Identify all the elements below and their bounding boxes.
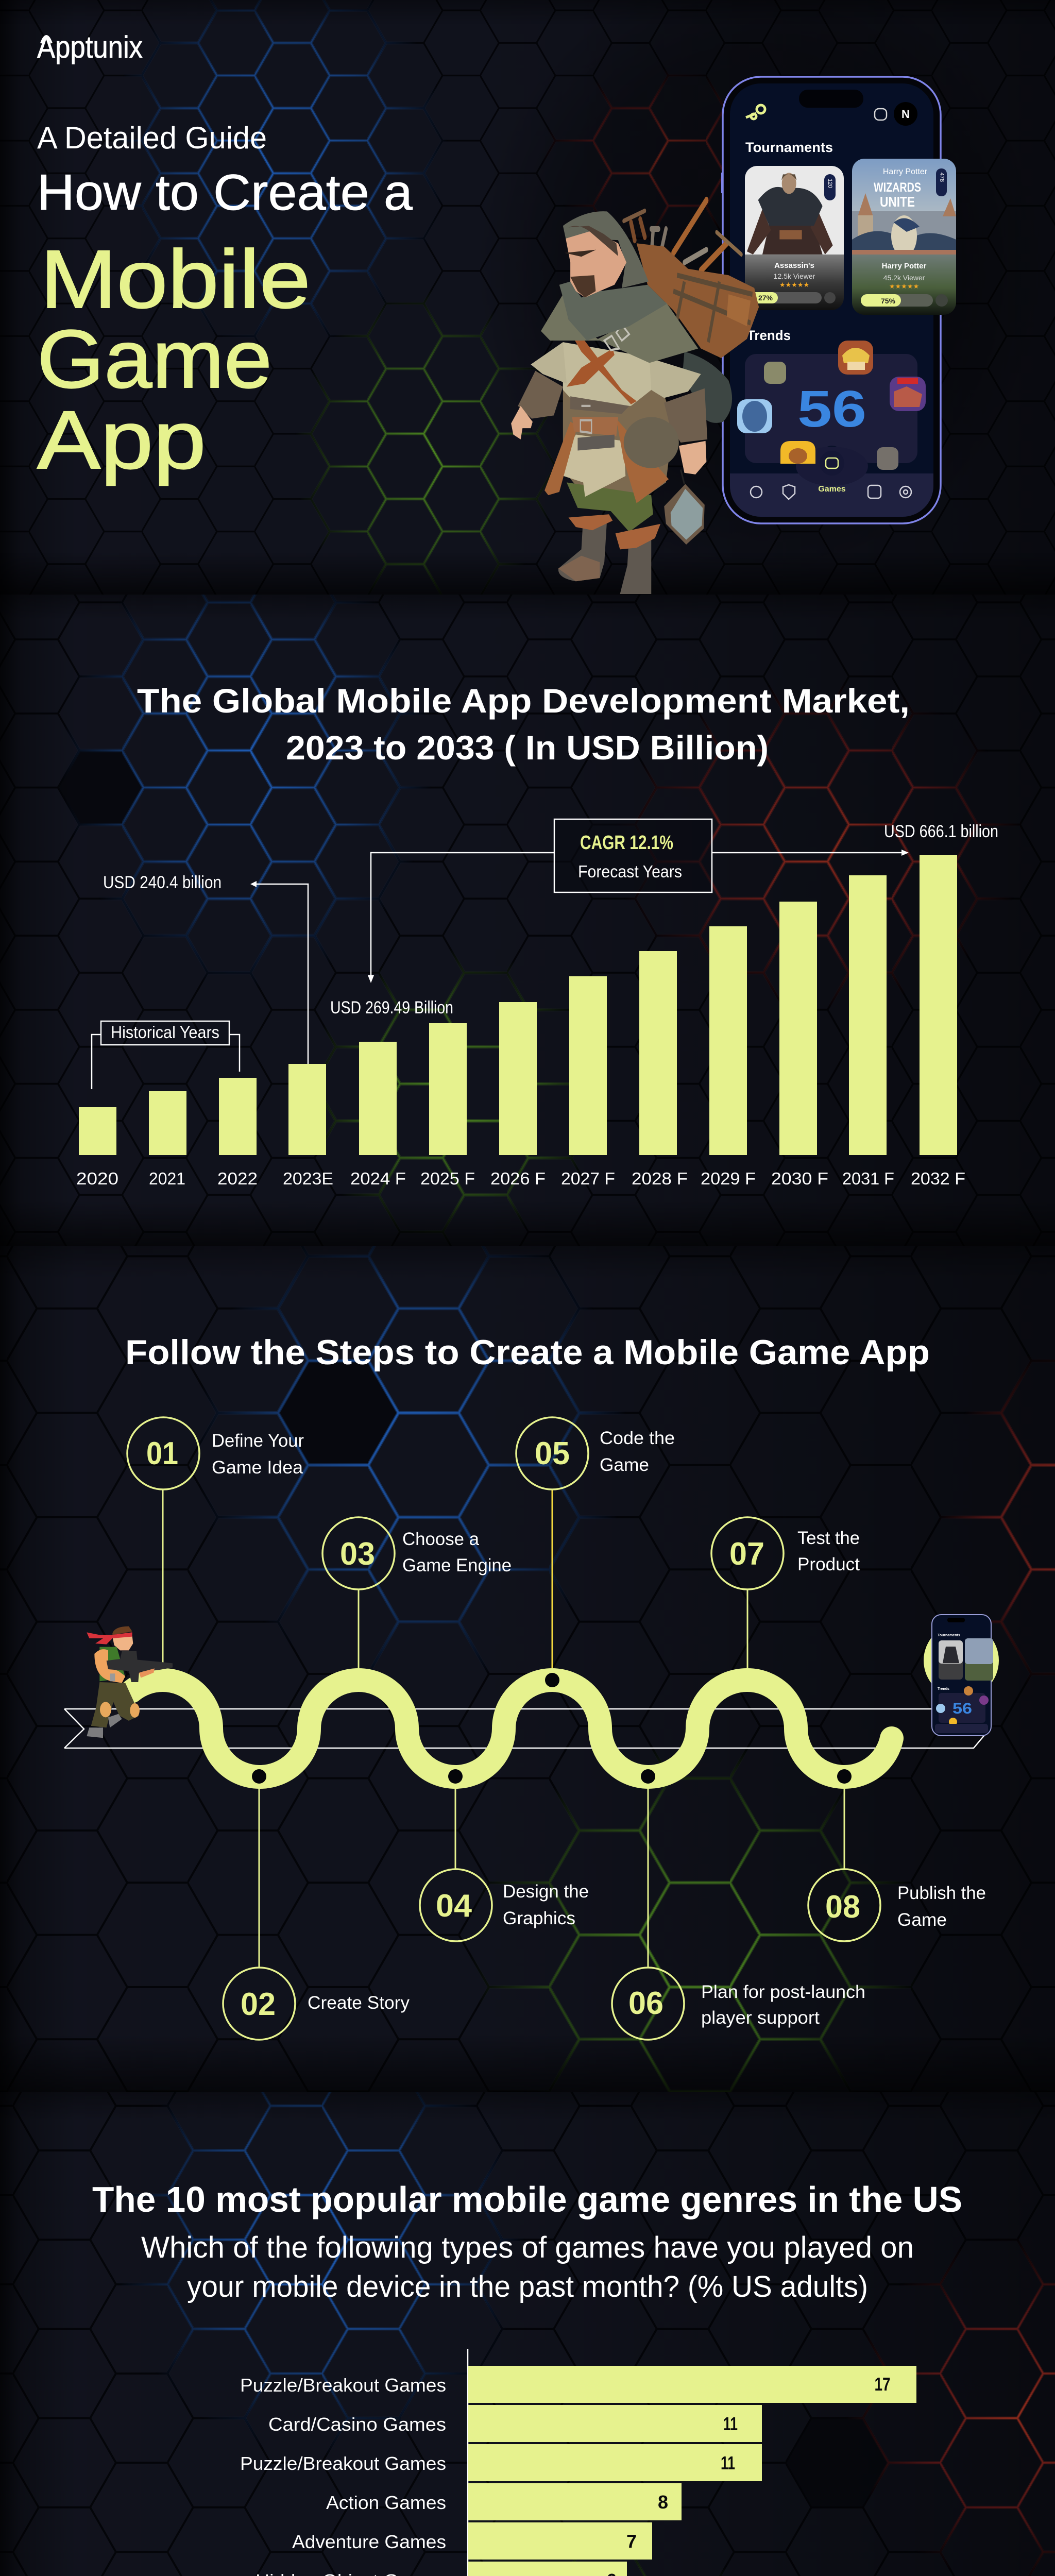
title highlight: App: App: [37, 394, 206, 486]
x axis labels: 2022: [217, 1169, 258, 1188]
step 08: Publish the: [897, 1883, 986, 1903]
scarf: [559, 282, 667, 341]
step 05: Game: [600, 1455, 649, 1475]
step 08: [808, 1869, 986, 1941]
x axis labels: [76, 1169, 965, 1188]
label: 2024 value: USD 269.49 Billion: [330, 998, 453, 1018]
bar values: [544, 2374, 890, 2576]
heading: genres: [92, 2179, 962, 2303]
heading: tournaments: Tournaments: [745, 140, 833, 155]
step 05: [516, 1417, 675, 1489]
step 06: [612, 1968, 865, 2040]
step 01: [127, 1417, 304, 1489]
step 06: player support: [701, 2008, 820, 2028]
arrow: CAGR to 2024 value: [368, 853, 554, 983]
card: assassin's: [737, 166, 844, 310]
step 03: 03: [340, 1536, 375, 1572]
label: 2023 value: USD 240.4 billion: [103, 873, 222, 892]
cross straps: [563, 317, 637, 404]
section 3 background: hexagons: [14, 1246, 1055, 2092]
card text: harry potter: [874, 167, 945, 305]
callout: CAGR forecast: CAGR 12.1%: [580, 832, 673, 854]
bar labels: Puzzle/Breakout Games: [240, 2453, 446, 2474]
buckles: [604, 325, 629, 350]
pouch: [624, 417, 679, 468]
lantern charm: [664, 470, 705, 545]
face: [566, 231, 626, 297]
title line: How to Create a: [37, 164, 413, 221]
x axis labels: 2031 F: [842, 1169, 894, 1188]
tunic skirt: [554, 435, 625, 497]
trends panel: [737, 341, 926, 486]
x axis labels: 2026 F: [490, 1169, 546, 1188]
bar values: 11: [721, 2452, 735, 2473]
bar chart: game genres: [62, 2349, 916, 2576]
hero title: [37, 121, 413, 486]
boot cuffs: [569, 514, 660, 549]
step connector lines: [163, 1490, 844, 1968]
hood: [563, 211, 649, 288]
torso: [563, 342, 655, 406]
bar values: 7: [626, 2531, 637, 2552]
step 04: [420, 1869, 589, 1941]
step 01: 01: [146, 1436, 178, 1471]
heading: genres: The 10 most popular mobile game genres in the US: [92, 2179, 962, 2219]
x axis labels: 2029 F: [701, 1169, 756, 1188]
step 05: 05: [535, 1436, 570, 1471]
step 03: [322, 1517, 512, 1589]
nav: center games button: [820, 451, 844, 476]
icon: mini phone target: Trends: [938, 1687, 949, 1691]
timeline ribbon: [64, 1709, 984, 1748]
cape back: [683, 352, 732, 423]
card text: assassin's: 12.5k Viewer: [774, 272, 815, 280]
x axis labels: 2030 F: [771, 1169, 828, 1188]
icon: mini phone target: Tournaments: [938, 1634, 960, 1637]
shoulder cape: [541, 294, 698, 363]
step 02: 02: [241, 1987, 276, 2022]
step 08: Game: [897, 1910, 947, 1930]
boots: [558, 517, 651, 594]
callout: CAGR forecast: [554, 819, 712, 892]
card text: harry potter: WIZARDS: [874, 180, 921, 195]
card text: assassin's: 120: [827, 179, 833, 188]
card: harry potter: [852, 159, 956, 315]
x axis labels: 2025 F: [420, 1169, 475, 1188]
timeline dots: [252, 1673, 852, 1784]
arrow: CAGR to 2032 value: [712, 850, 909, 856]
icon: mini phone target: 56: [952, 1700, 972, 1717]
game key icon: [746, 105, 765, 119]
step 07: [711, 1517, 860, 1589]
heading: market chart: 2023 to 2033 ( In USD Billion): [286, 728, 769, 767]
timeline wave: [131, 1680, 892, 1777]
kicker: A Detailed Guide: [37, 121, 267, 155]
card text: harry potter: ★★★★★: [889, 282, 919, 290]
x axis labels: 2024 F: [350, 1169, 406, 1188]
logo: Apptunix: [37, 30, 143, 64]
beard: [570, 275, 595, 297]
forearm wraps: [518, 371, 707, 443]
heading: market chart: The Global Mobile App Development Market,: [137, 682, 910, 720]
title highlight: Game: Game: [37, 313, 272, 405]
step 06: 06: [628, 1986, 663, 2021]
x axis labels: 2028 F: [632, 1169, 688, 1188]
step 01: Define Your: [212, 1431, 304, 1451]
step 05: Code the: [600, 1428, 675, 1448]
bar labels: Action Games: [326, 2492, 446, 2513]
character: dwarf adventurer: [511, 200, 759, 594]
heading: market chart: [137, 682, 910, 767]
arrow: 2023 bar to value: [250, 881, 308, 1064]
card text: assassin's: [758, 179, 833, 302]
section 2 background: hexagons: [14, 595, 1031, 1236]
x axis labels: 2027 F: [561, 1169, 615, 1188]
step 08: 08: [825, 1889, 860, 1925]
bars: [468, 2366, 916, 2576]
leather apron: [544, 419, 669, 503]
bar chart: market size: [76, 855, 965, 1188]
bar values: 8: [658, 2492, 668, 2513]
bar labels: Adventure Games: [292, 2531, 446, 2552]
app icon: clash: [838, 341, 873, 375]
step 04: Design the: [503, 1882, 589, 1902]
body underlay: [563, 345, 673, 503]
card text: assassin's: Assassin's: [774, 261, 814, 270]
bar values: 11: [723, 2413, 738, 2434]
step 04: 04: [436, 1888, 472, 1924]
callout: historical years: Historical Years: [111, 1023, 219, 1042]
subtitle line 2: your mobile device in the past month? (% US adults): [187, 2270, 868, 2303]
belts: [570, 396, 629, 450]
card text: assassin's: ★★★★★: [779, 281, 809, 289]
profile badge: N: [901, 108, 910, 121]
hair: [566, 226, 618, 256]
callout: CAGR forecast: Forecast Years: [578, 862, 682, 881]
brow: [565, 250, 596, 257]
app icon: soldier: [877, 447, 898, 470]
icon: mini phone target: [924, 1615, 999, 1736]
card text: harry potter: 75%: [881, 297, 896, 305]
icon: soldier with rifle: [87, 1626, 173, 1738]
app icon: marvel: [890, 377, 926, 411]
weapons on backpack: [624, 200, 741, 270]
phone mockup: tournaments app: [721, 77, 956, 523]
card text: harry potter: 478: [939, 173, 945, 182]
heading: steps: Follow the Steps to Create a Mobile Game App: [125, 1333, 930, 1372]
x axis labels: 2021: [149, 1169, 185, 1188]
step 06: Plan for post-launch: [701, 1982, 865, 2002]
card text: harry potter: 45.2k Viewer: [883, 274, 925, 282]
nav label: games: Games: [818, 485, 846, 494]
sleeves: [531, 342, 701, 398]
label: 2032 value: USD 666.1 billion: [884, 822, 998, 841]
x axis labels: 2023E: [283, 1169, 333, 1188]
subtitle: Which of the following types of games have you played on: [141, 2231, 914, 2264]
bar labels: Puzzle/Breakout Games: [240, 2375, 446, 2396]
step 07: 07: [729, 1536, 764, 1572]
heading: trends: Trends: [747, 328, 791, 343]
bar labels: [62, 2375, 446, 2576]
step 01: Game Idea: [212, 1458, 303, 1478]
step 07: Product: [797, 1554, 860, 1574]
metric: 56: 56: [797, 380, 866, 438]
bar values: 17: [875, 2374, 890, 2395]
bar labels: Card/Casino Games: [268, 2414, 446, 2435]
x axis labels: 2020: [76, 1169, 118, 1188]
app icon: creature: [764, 362, 786, 384]
chat icon: [875, 109, 887, 120]
step 03: Choose a: [402, 1529, 480, 1549]
x axis labels: 2032 F: [911, 1169, 965, 1188]
step 02: [223, 1968, 410, 2040]
step 02: Create Story: [308, 1993, 410, 2013]
trousers: [567, 482, 653, 532]
section 1 background: hexagons: [0, 0, 1055, 618]
app icon: ice king: [737, 399, 772, 433]
card text: assassin's: 27%: [758, 294, 773, 302]
card text: harry potter: Harry Potter: [882, 262, 927, 270]
step 04: Graphics: [503, 1908, 575, 1928]
backpack: [637, 243, 759, 358]
nav icons: [751, 485, 911, 499]
app icon: fighter: [780, 441, 815, 464]
profile badge: [894, 102, 917, 126]
step 03: Game Engine: [402, 1555, 512, 1575]
step 07: Test the: [797, 1528, 860, 1548]
title highlight: Mobile: Mobile: [40, 233, 311, 325]
section 4 background: hexagons: [14, 2092, 1055, 2576]
callout: historical years: [92, 1021, 240, 1089]
card text: harry potter: UNITE: [880, 194, 915, 210]
hands: [511, 406, 706, 474]
card text: harry potter: Harry Potter: [883, 167, 928, 176]
